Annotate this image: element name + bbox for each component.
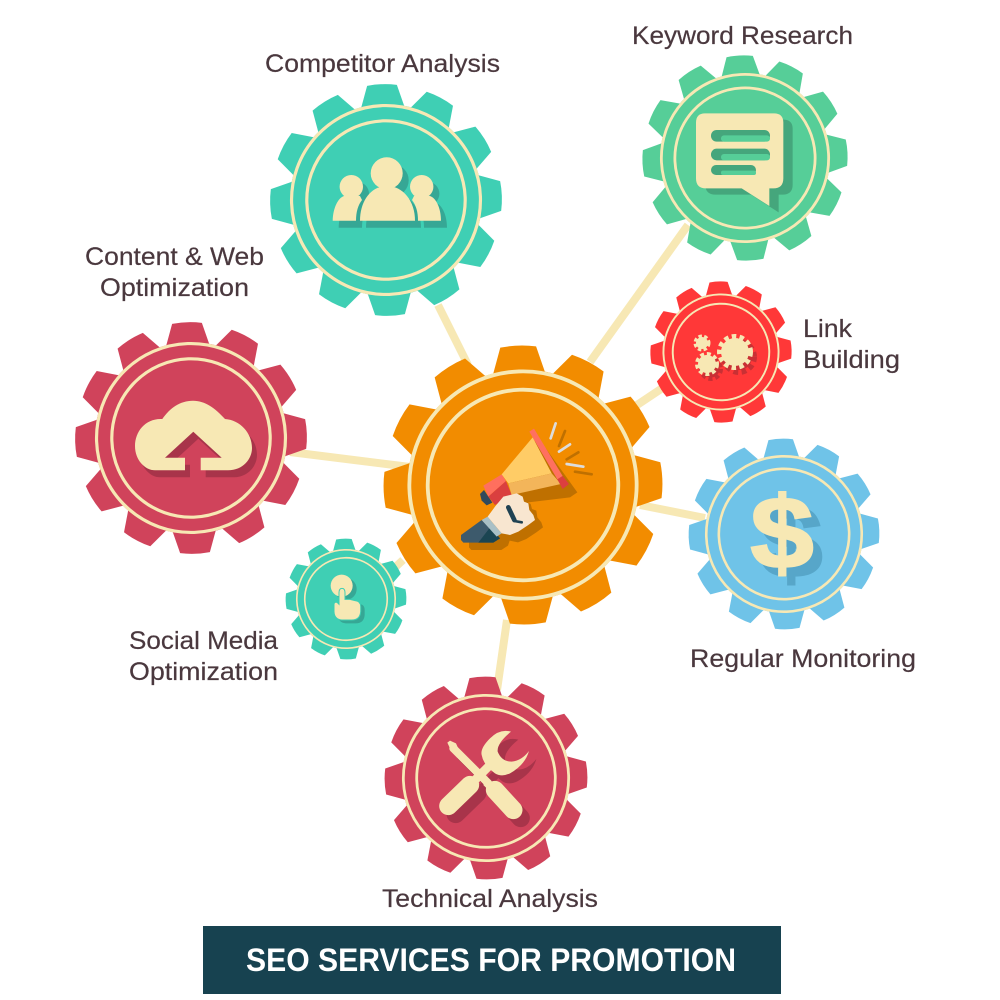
panel: social media optimization: [129, 537, 408, 686]
hand shadow: [469, 501, 543, 550]
label: content and web optimization: [85, 243, 264, 302]
megaphone body: [480, 429, 569, 505]
gear: competitor: [266, 80, 506, 320]
label: link building: [803, 315, 900, 374]
panel: technical analysis: [381, 673, 598, 913]
gear: social: [284, 537, 408, 661]
label: link building: Building: [803, 346, 900, 374]
icon: wrench and screwdriver: [447, 731, 536, 818]
panel: competitor analysis: [265, 50, 506, 320]
icon: dollar sign: $: [759, 485, 823, 599]
label: keyword research: Keyword Research: [632, 22, 853, 50]
label: social media optimization: Optimization: [129, 658, 278, 686]
label: competitor analysis: Competitor Analysis: [265, 50, 500, 78]
label: content and web optimization: Content & Web: [85, 243, 264, 271]
hand and sleeve: [461, 493, 543, 550]
banner: title: [203, 926, 781, 994]
icon: speech bubble: [696, 113, 793, 212]
connector lines: [290, 225, 705, 690]
panel: link building: [648, 279, 900, 425]
gear: content: [71, 318, 311, 558]
panel: content and web optimization: [71, 243, 311, 558]
icon: small gears: [696, 337, 752, 378]
label: link building: Link: [803, 315, 853, 343]
icon: cloud upload: [135, 401, 257, 477]
panel: keyword research: [632, 22, 853, 266]
gear: monitoring: [685, 435, 883, 633]
gear: keyword: [637, 50, 853, 266]
gear: center: [379, 341, 667, 629]
panel: central gear: [379, 341, 667, 629]
sound lines: [551, 423, 592, 474]
icon: people: [333, 157, 447, 228]
label: technical analysis: Technical Analysis: [382, 885, 598, 913]
label: social media optimization: [129, 627, 278, 686]
icon: dollar sign: $: [750, 476, 814, 590]
gear: technical: [381, 673, 591, 883]
label: social media optimization: Social Media: [129, 627, 278, 655]
icon: megaphone in hand: [461, 423, 592, 550]
gear: link: [648, 279, 794, 425]
label: content and web optimization: Optimization: [100, 274, 249, 302]
icon: touch hand: [331, 575, 365, 623]
label: regular monitoring: Regular Monitoring: [690, 645, 916, 673]
panel: regular monitoring: [685, 435, 916, 673]
title text: SEO SERVICES FOR PROMOTION: [246, 942, 736, 978]
megaphone shadow: [510, 437, 577, 503]
